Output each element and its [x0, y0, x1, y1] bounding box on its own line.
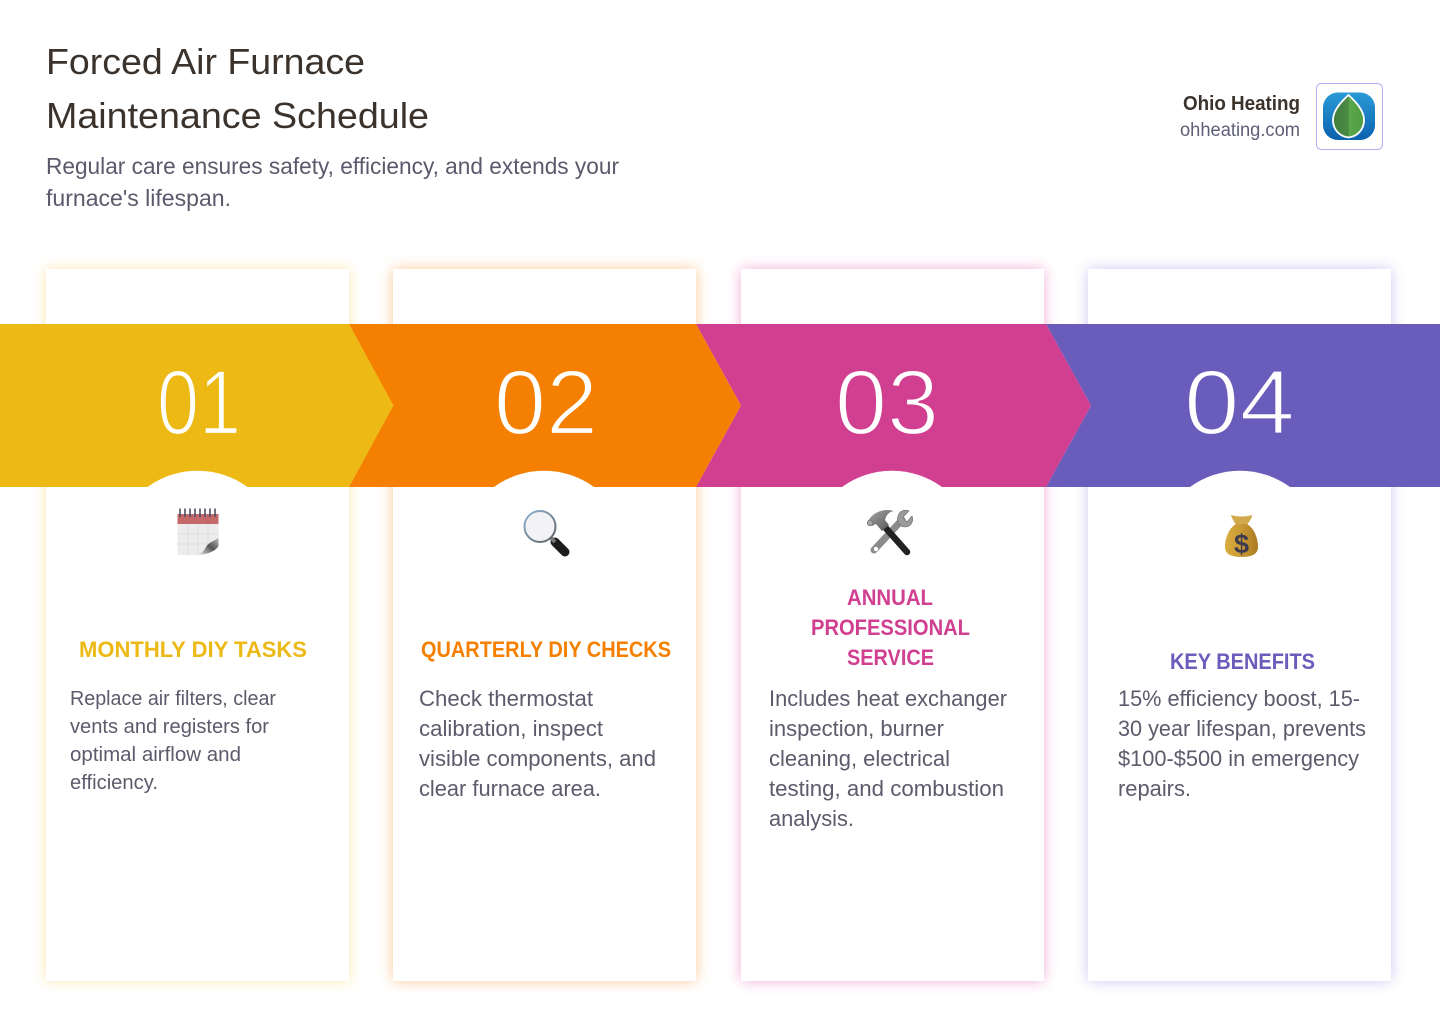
number 04: 04: [1184, 352, 1295, 454]
text block: annual: testing, and combustion: [769, 776, 1004, 801]
panel: card 2: [393, 269, 696, 981]
title: [46, 41, 429, 136]
brand name: [1180, 93, 1300, 141]
text block: monthly: efficiency.: [70, 772, 158, 794]
number 02: 02: [494, 352, 598, 454]
text block: quarterly: calibration, inspect: [419, 716, 603, 741]
number 01: 01: [157, 352, 241, 454]
text block: quarterly: [419, 686, 656, 801]
heading: annual: ANNUAL: [847, 585, 933, 610]
text block: annual: cleaning, electrical: [769, 746, 950, 771]
number 03: 03: [835, 352, 939, 454]
heading: quarterly: QUARTERLY DIY CHECKS: [421, 637, 671, 662]
circle tab 3: [842, 471, 942, 487]
circle tab 4: [1190, 471, 1290, 487]
panel: card 3: [741, 269, 1044, 981]
text block: annual: analysis.: [769, 806, 854, 831]
heading: benefits: KEY BENEFITS: [1170, 649, 1315, 674]
brand name: ohheating.com: [1180, 120, 1300, 141]
title: Forced Air Furnace: [46, 41, 365, 82]
circle tab 1: [148, 471, 248, 487]
text block: monthly: Replace air filters, clear: [70, 688, 276, 710]
arrow band: step 1: [0, 324, 394, 487]
arrow band: step 3: [696, 324, 1091, 487]
text block: monthly: vents and registers for: [70, 716, 269, 738]
text block: monthly: optimal airflow and: [70, 744, 241, 766]
subtitle: furnace's lifespan.: [46, 185, 231, 211]
icon: money bag: $: [1234, 529, 1249, 559]
panel: card 1: [46, 269, 349, 981]
icon: brand logo: [1316, 84, 1382, 150]
subtitle: [46, 153, 619, 211]
heading: annual: [811, 585, 970, 670]
text block: quarterly: Check thermostat: [419, 686, 593, 711]
icon: money bag: [1225, 515, 1258, 559]
icon: calendar: [178, 508, 218, 555]
text block: benefits: 15% efficiency boost, 15-: [1118, 686, 1360, 711]
text block: benefits: repairs.: [1118, 776, 1191, 801]
text block: annual: inspection, burner: [769, 716, 944, 741]
circle tab 2: [494, 471, 594, 487]
text block: annual: [769, 686, 1007, 831]
brand name: Ohio Heating: [1183, 93, 1300, 115]
text block: annual: Includes heat exchanger: [769, 686, 1007, 711]
heading: annual: PROFESSIONAL: [811, 615, 970, 640]
text block: benefits: $100-$500 in emergency: [1118, 746, 1359, 771]
text block: quarterly: clear furnace area.: [419, 776, 601, 801]
heading: annual: SERVICE: [847, 645, 934, 670]
heading: monthly: MONTHLY DIY TASKS: [79, 637, 307, 662]
arrow band: step 2: [349, 324, 741, 487]
text block: benefits: 30 year lifespan, prevents: [1118, 716, 1366, 741]
icon: magnifying glass: [524, 511, 565, 552]
text block: monthly: [70, 688, 276, 794]
panel: card 4: [1088, 269, 1391, 981]
text block: benefits: [1118, 686, 1366, 801]
title: Maintenance Schedule: [46, 95, 429, 136]
icon: hammer and wrench: [867, 510, 913, 552]
arrow band: step 4: [1046, 324, 1440, 487]
text block: quarterly: visible components, and: [419, 746, 656, 771]
subtitle: Regular care ensures safety, efficiency, and extends your: [46, 153, 619, 179]
